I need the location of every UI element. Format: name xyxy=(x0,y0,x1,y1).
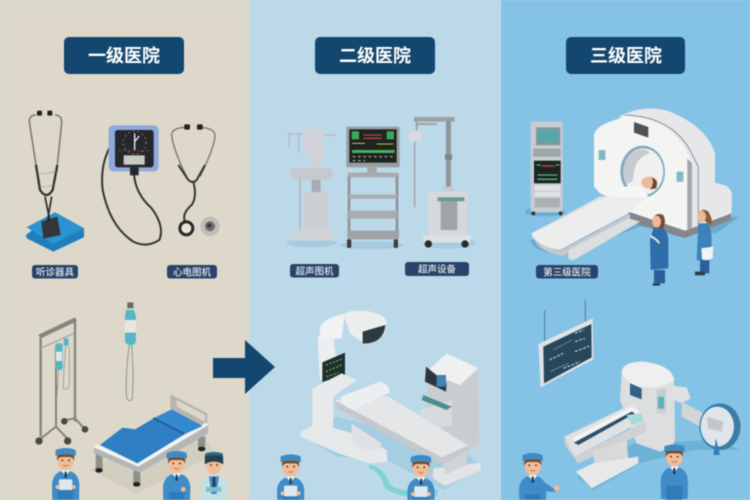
label: 心电图机: 心电图机 xyxy=(173,266,211,278)
panel: tertiary hospital background xyxy=(501,0,750,500)
icon: ultrasound cart xyxy=(287,128,337,247)
icon: DSA imaging machine with table xyxy=(300,311,483,497)
icon: blood pressure monitor xyxy=(102,125,161,245)
heading: 一级医院 xyxy=(64,37,184,74)
icon: IV bottle xyxy=(125,302,136,401)
panel: secondary hospital background xyxy=(249,0,501,500)
label: 第三级医院: 第三级医院 xyxy=(543,266,591,278)
icon: ultrasound unit on arm stand xyxy=(409,117,475,249)
arrow: progression to next level xyxy=(213,340,275,394)
icon: patient monitor on cart xyxy=(340,127,403,249)
heading: 二级医院: 二级医院 xyxy=(339,45,411,66)
label: 超声图机: 超声图机 xyxy=(295,266,334,278)
label: 第三级医院 xyxy=(536,265,598,278)
panel: primary hospital background xyxy=(0,0,249,500)
icon: stethoscope with chest piece xyxy=(172,124,220,236)
figure: doctor, middle xyxy=(163,451,190,500)
figure: doctor with tablet, secondary right xyxy=(407,455,435,500)
figure: doctor, tertiary right xyxy=(661,444,688,500)
figure: female technician, front xyxy=(650,214,668,286)
icon: CT scanner xyxy=(530,108,740,261)
icon: wall-mounted display screen xyxy=(538,300,593,387)
figure: doctor with tablet, left xyxy=(52,448,79,500)
icon: IV drip stand xyxy=(35,319,88,445)
figure: female technician, rear xyxy=(695,210,713,275)
heading: 一级医院: 一级医院 xyxy=(88,45,160,66)
label: 超声图机 xyxy=(290,264,339,278)
icon: hospital bed xyxy=(90,395,217,493)
label: 超声设备: 超声设备 xyxy=(418,264,456,276)
figure: doctor in light coat xyxy=(200,452,228,500)
heading: 二级医院 xyxy=(315,37,435,74)
label: 听诊器具 xyxy=(32,265,78,278)
figure: doctor gesturing, tertiary left xyxy=(519,453,560,500)
label: 心电图机 xyxy=(167,265,217,278)
label: 听诊器具: 听诊器具 xyxy=(36,266,74,278)
icon: stethoscope on blue stand xyxy=(26,111,84,252)
label: 超声设备 xyxy=(405,262,469,276)
icon: robotic MRI machine xyxy=(564,362,741,490)
icon: control console xyxy=(525,122,565,216)
heading: 三级医院 xyxy=(566,37,685,74)
figure: doctor with tablet, secondary left xyxy=(277,454,304,500)
heading: 三级医院: 三级医院 xyxy=(590,45,662,66)
